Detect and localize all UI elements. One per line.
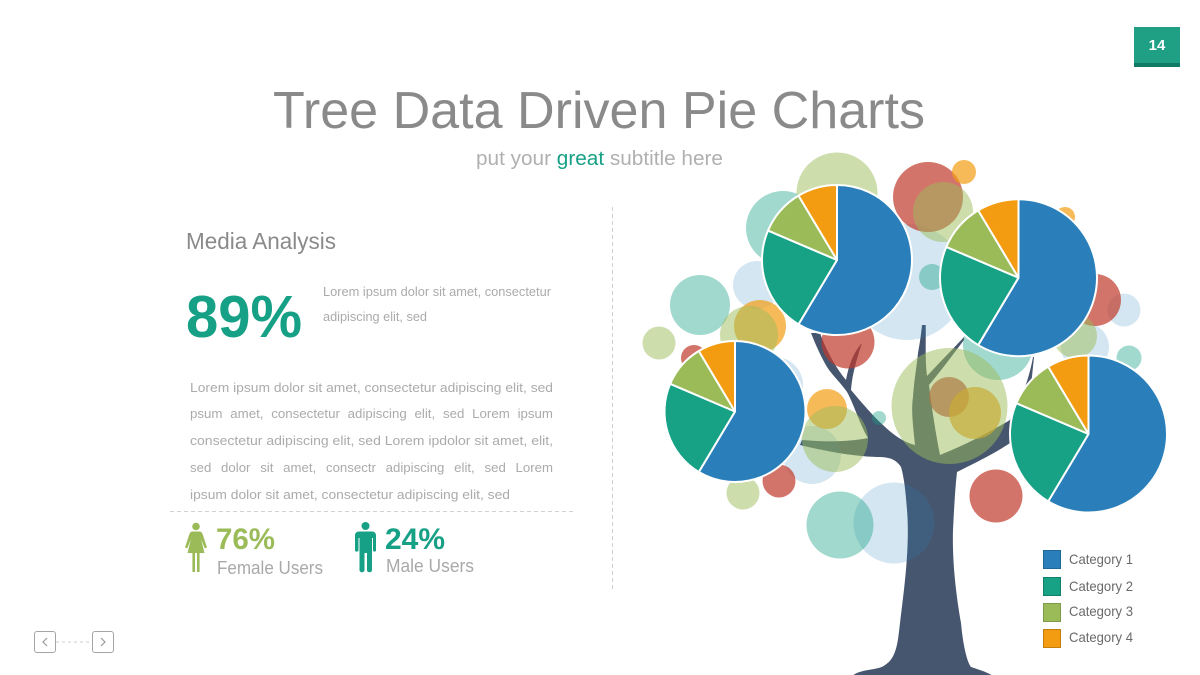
page number badge (1134, 27, 1180, 67)
stat description (323, 284, 552, 324)
icon: male figure (355, 522, 376, 572)
body paragraph: psum amet, consectetur adipiscing elit, sed Lorem ipsum (190, 406, 553, 421)
male users stat (355, 522, 474, 576)
legend: Category 3 (1069, 603, 1133, 619)
stat description: adipiscing elit, sed (323, 309, 427, 324)
big stat: 89%: 89% (186, 284, 302, 350)
stat description: Lorem ipsum dolor sit amet, consectetur (323, 284, 552, 299)
value: 76%: 76% (216, 523, 275, 556)
body paragraph: ipsum dolor sit amet, consectetur adipiscing elit, sed (190, 487, 510, 502)
body paragraph: sed dolor sit amet, consectr adipiscing elit, sed Lorem (190, 460, 553, 475)
vertical divider (612, 207, 614, 590)
icon: previous button (34, 632, 56, 652)
female users stat (185, 523, 323, 578)
label: female users: Female Users (217, 558, 323, 578)
legend: Category 4 (1069, 629, 1133, 645)
legend: Category 1 (1069, 551, 1133, 567)
pie chart: top left (762, 185, 912, 335)
pie chart: middle left (665, 341, 805, 482)
value: 24%: 24% (385, 523, 445, 556)
subtitle: put your great subtitle here (476, 148, 723, 170)
pie chart: top right (940, 199, 1097, 356)
body paragraph: consectetur adipiscing elit, sed Lorem ipdolor sit amet, elit, (190, 433, 553, 448)
horizontal divider (170, 510, 573, 512)
pie chart: middle right (1010, 356, 1167, 512)
legend (1044, 550, 1133, 648)
title: Tree Data Driven Pie Charts (273, 82, 925, 140)
icon: next button (92, 632, 114, 652)
body paragraph (190, 380, 553, 502)
label: male users: Male Users (386, 556, 474, 576)
heading: media analysis: Media Analysis (186, 228, 336, 254)
legend: Category 2 (1069, 578, 1133, 594)
decorative canopy circles (642, 152, 1142, 564)
body paragraph: Lorem ipsum dolor sit amet, consectetur adipiscing elit, sed (190, 380, 553, 395)
icon: female figure (185, 523, 207, 572)
tree trunk and branches (800, 325, 1034, 675)
page number badge: 14 (1149, 37, 1166, 54)
navigation arrows (34, 632, 114, 652)
